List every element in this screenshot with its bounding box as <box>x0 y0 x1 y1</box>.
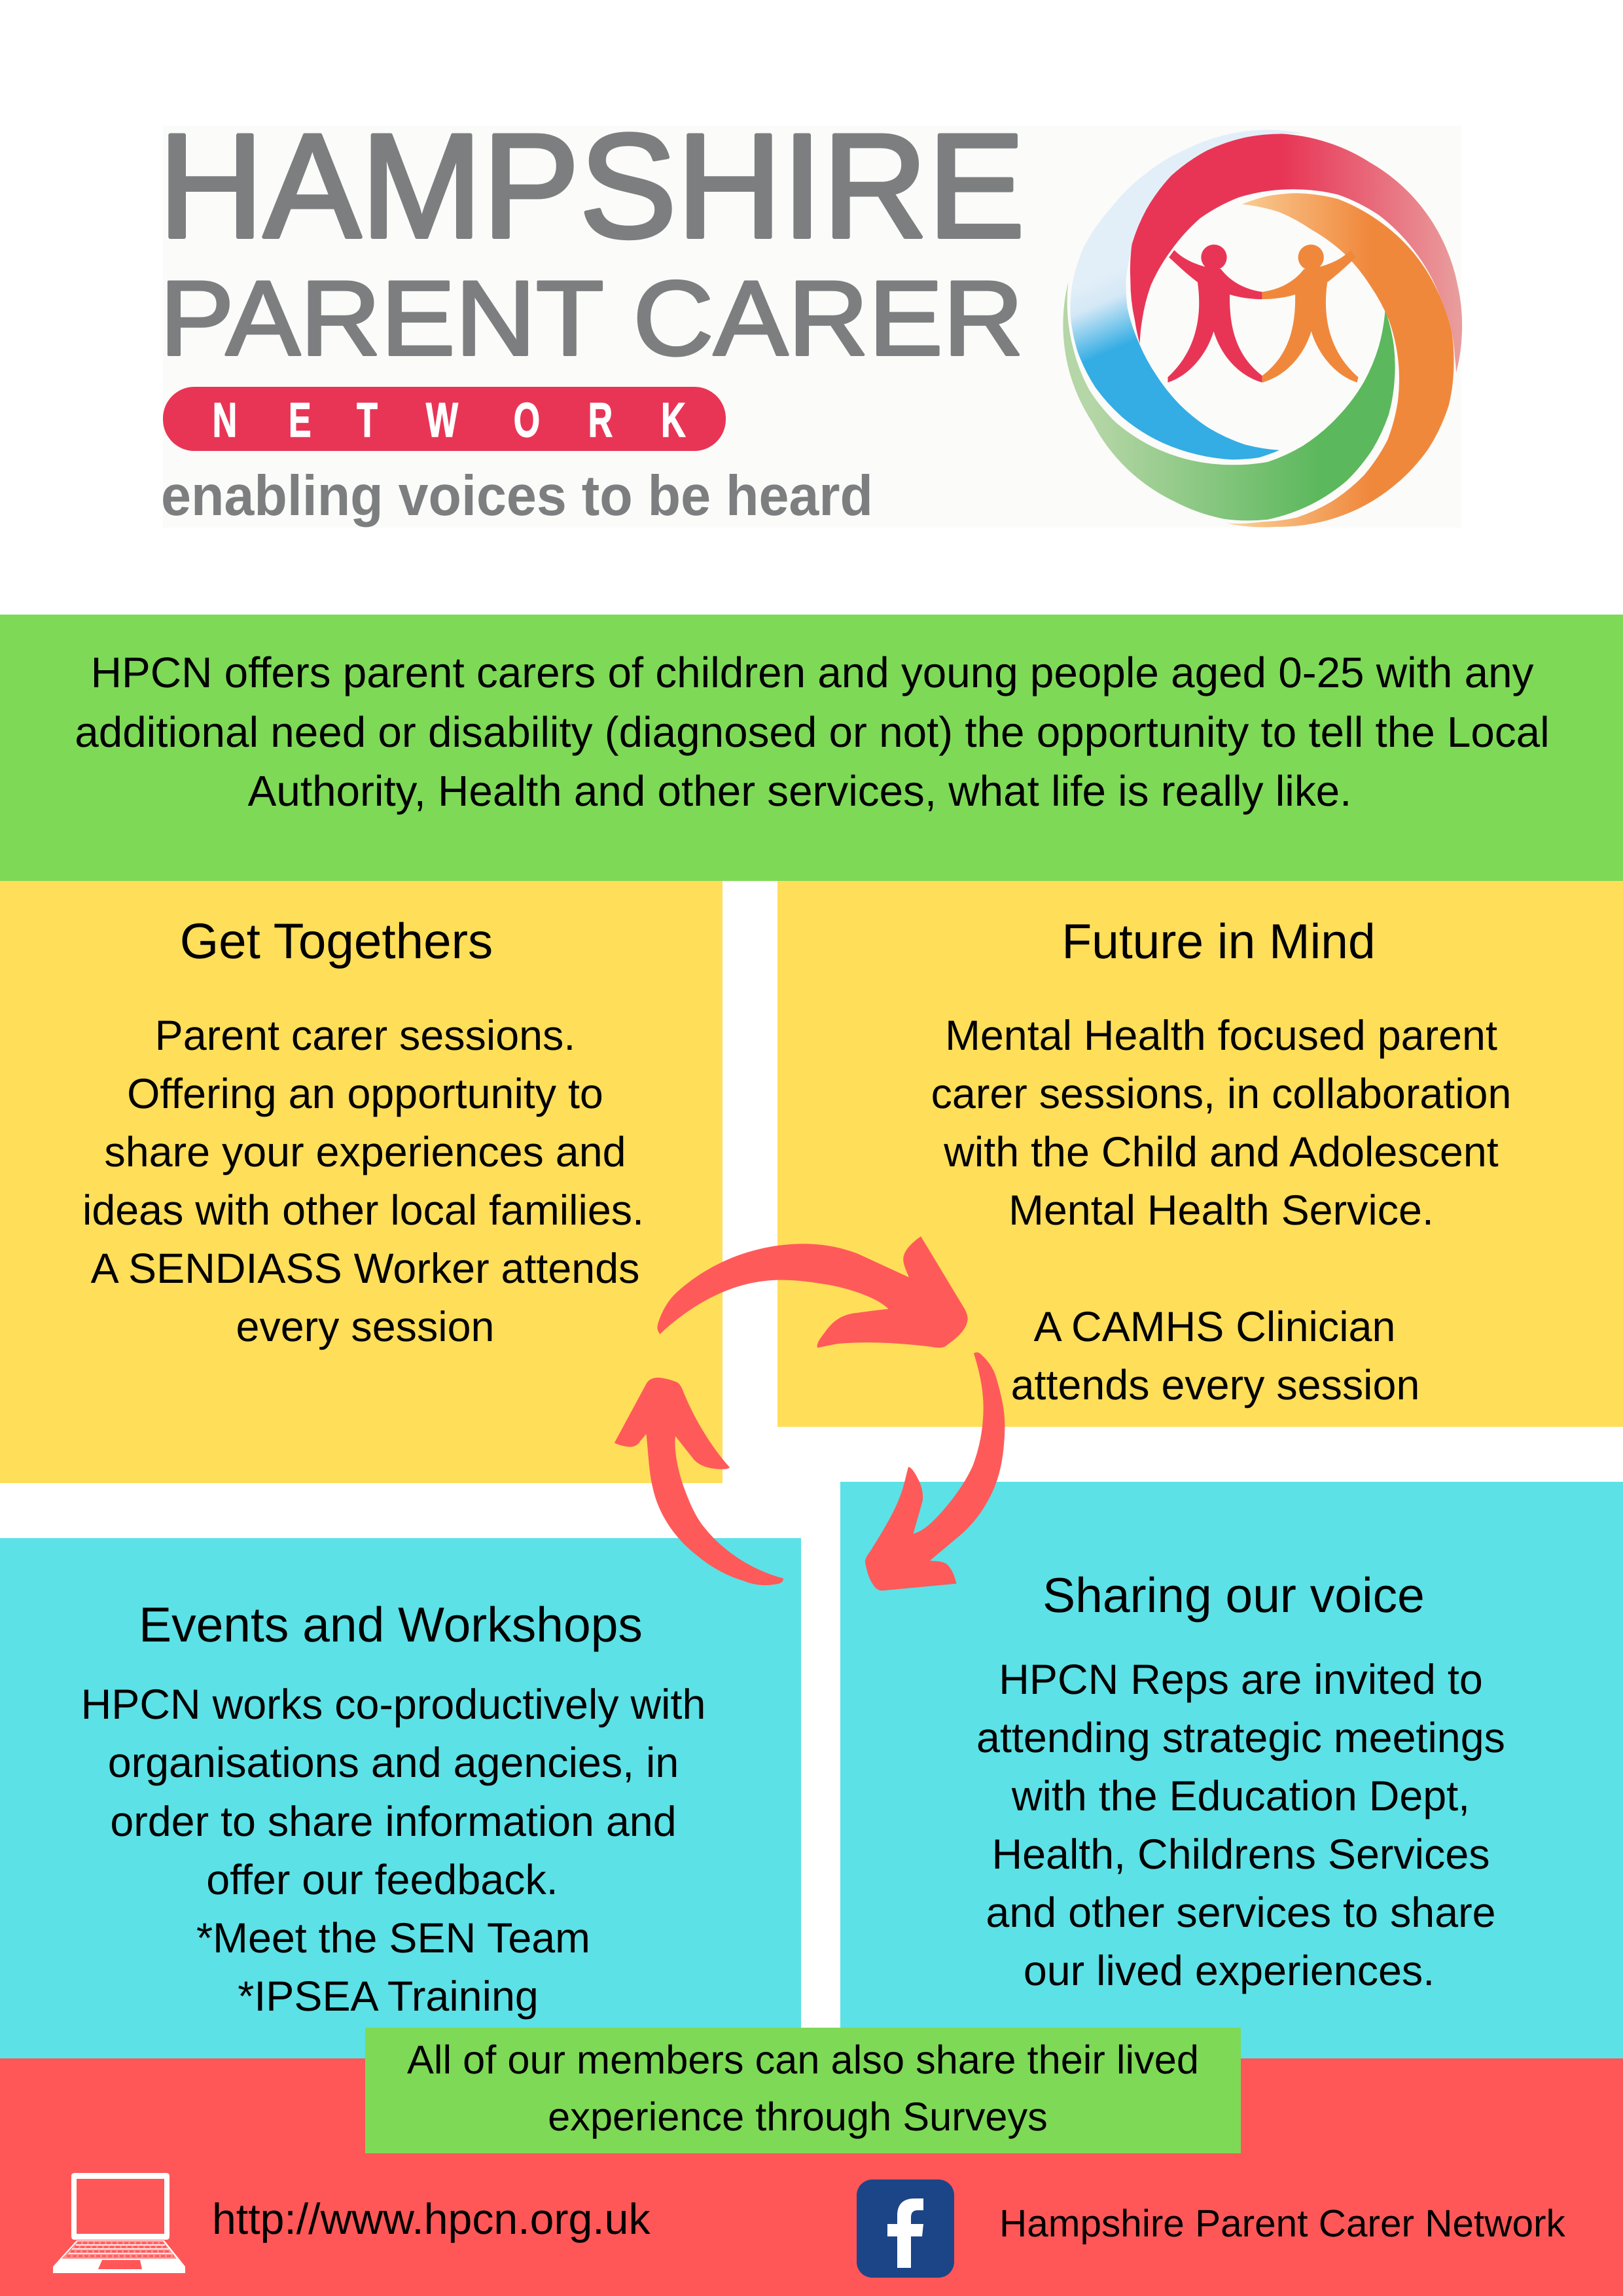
body: Sharing our voice: Health, Childrens Services <box>991 1831 1490 1878</box>
intro text <box>75 649 1550 815</box>
body: Events and Workshops: order to share information and <box>110 1798 677 1845</box>
body: Sharing our voice: HPCN Reps are invited to <box>999 1656 1483 1703</box>
body: Get Togethers: Parent carer sessions. <box>155 1012 575 1059</box>
intro band <box>0 615 1623 881</box>
heading: Get Togethers: Get Togethers <box>180 914 493 969</box>
red figure <box>1168 245 1262 382</box>
body: Get Togethers: A SENDIASS Worker attends <box>91 1245 639 1292</box>
body: Sharing our voice: and other services to share <box>986 1889 1496 1936</box>
body: Events and Workshops: *Meet the SEN Team <box>196 1914 590 1962</box>
body: Get Togethers: ideas with other local families. <box>82 1187 644 1234</box>
logo wordmark: Parent Carer: PARENT CARER <box>160 259 1024 378</box>
intro text: Authority, Health and other services, what life is really like. <box>248 767 1351 815</box>
body: Get Togethers: Offering an opportunity to <box>127 1070 603 1117</box>
body: Future in Mind: carer sessions, in collaboration <box>931 1070 1511 1117</box>
body: Events and Workshops: offer our feedback. <box>206 1856 558 1903</box>
body: Events and Workshops: HPCN works co-productively with <box>81 1681 705 1728</box>
body: Future in Mind: Mental Health Service. <box>1008 1187 1434 1234</box>
heading: Sharing our voice: Sharing our voice <box>1043 1568 1425 1623</box>
body: Future in Mind: attends every session <box>1011 1361 1419 1408</box>
Facebook page name: Hampshire Parent Carer Network <box>999 2202 1566 2245</box>
arrow: right, top to bottom <box>865 1352 1005 1590</box>
panel: Events and Workshops <box>0 1538 801 2058</box>
orange swirl <box>1227 193 1454 527</box>
body: Future in Mind: Mental Health focused parent <box>945 1012 1497 1059</box>
callout text <box>407 2037 1199 2139</box>
panel: Sharing our voice <box>840 1482 1623 2058</box>
icon: Facebook <box>857 2179 954 2278</box>
callout text: experience through Surveys <box>548 2094 1048 2139</box>
green swirl <box>1063 282 1395 520</box>
body: Sharing our voice: with the Education Dept, <box>1011 1772 1470 1820</box>
website link: http://www.hpcn.org.uk <box>212 2195 651 2244</box>
body: Future in Mind: A CAMHS Clinician <box>1034 1303 1395 1350</box>
footer band <box>0 2058 1623 2296</box>
orange figure <box>1262 245 1359 382</box>
body: Events and Workshops: organisations and agencies, in <box>108 1739 679 1786</box>
arrow: top, left to right <box>657 1236 968 1348</box>
logo wordmark: Hampshire: HAMPSHIRE <box>158 103 1025 268</box>
logo tagline: enabling voices to be heard <box>161 464 873 528</box>
body: Sharing our voice: our lived experiences. <box>1024 1947 1435 1994</box>
body: Events and Workshops <box>81 1681 705 2020</box>
blue swirl <box>1071 130 1302 459</box>
panel: Get Togethers <box>0 881 722 1483</box>
body: Future in Mind <box>931 1012 1511 1408</box>
body: Future in Mind: with the Child and Adolescent <box>943 1128 1499 1175</box>
intro text: HPCN offers parent carers of children and young people aged 0-25 with any <box>91 649 1534 696</box>
logo pill: Network: NETWORK <box>213 393 686 447</box>
body: Events and Workshops: *IPSEA Training <box>238 1973 539 2020</box>
logo: Hampshire Parent Carer Network <box>158 103 1462 528</box>
body: Get Togethers: share your experiences and <box>104 1128 626 1175</box>
heading: Events and Workshops: Events and Workshops <box>139 1597 643 1652</box>
heading: Future in Mind: Future in Mind <box>1061 914 1376 969</box>
callout text: All of our members can also share their lived <box>407 2037 1199 2082</box>
body: Get Togethers: every session <box>236 1303 494 1350</box>
cycle arrows <box>615 1236 1005 1590</box>
body: Get Togethers <box>82 1012 644 1350</box>
logo background <box>163 126 1461 528</box>
panel: Future in Mind <box>777 881 1623 1427</box>
intro text: additional need or disability (diagnosed or not) the opportunity to tell the Local <box>75 708 1550 756</box>
red swirl <box>1130 134 1462 373</box>
icon: laptop <box>53 2173 185 2273</box>
body: Sharing our voice: attending strategic meetings <box>976 1714 1505 1761</box>
callout: surveys <box>365 2028 1241 2153</box>
arrow: left, bottom to top <box>615 1378 783 1585</box>
body: Sharing our voice <box>976 1656 1505 1994</box>
logo emblem: swirl and two figures <box>1063 130 1462 527</box>
